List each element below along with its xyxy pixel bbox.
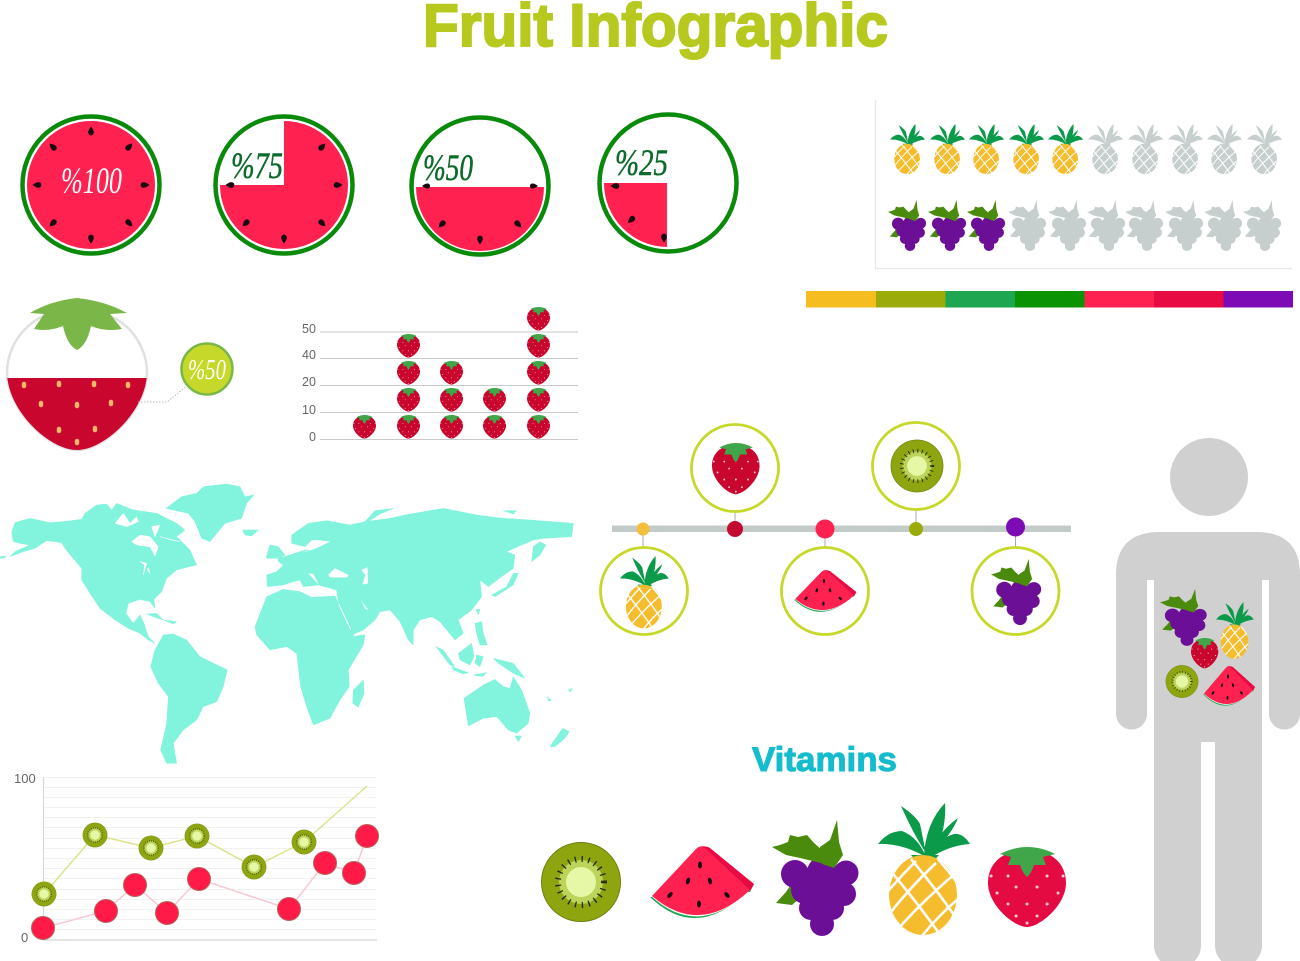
gauge: watermelon 50%: %50 xyxy=(423,148,473,189)
icon: strawberry in body xyxy=(1191,638,1218,668)
strawberry bar chart: 0 xyxy=(309,430,316,444)
gauge: watermelon 75% xyxy=(216,116,352,254)
colour bar xyxy=(806,291,1293,308)
gauge: watermelon 50% xyxy=(412,118,548,254)
icon: watermelon xyxy=(794,570,856,612)
grape row: 3 of 10 xyxy=(888,200,1281,251)
vitamins fruit row xyxy=(542,803,1066,943)
icon: kiwi in body xyxy=(1166,665,1198,698)
icon: watermelon in body xyxy=(1203,666,1255,706)
series: kiwi xyxy=(32,786,367,906)
heading: vitamins: Vitamins xyxy=(752,741,897,779)
world map xyxy=(0,484,573,763)
icon: pineapple in body xyxy=(1216,602,1254,662)
person silhouette xyxy=(1116,438,1300,961)
line chart: 0 xyxy=(21,930,28,945)
icon: grapes in body xyxy=(1160,589,1207,646)
map: eurasia, africa and oceania xyxy=(255,508,573,747)
callout badge 50%: %50 xyxy=(188,354,226,386)
line chart: 100 xyxy=(14,771,36,786)
gauge: watermelon 75%: %75 xyxy=(231,146,283,187)
icon: kiwi xyxy=(891,440,943,492)
pineapple row: 5 of 10 xyxy=(890,124,1282,177)
series: watermelon xyxy=(32,824,378,940)
strawberry bar chart: 50 xyxy=(302,322,316,336)
line chart xyxy=(14,771,378,945)
strawberry gauge 50% xyxy=(7,298,232,450)
gauge: watermelon 100%: %100 xyxy=(61,161,122,202)
icon: grapes xyxy=(772,820,858,936)
timeline xyxy=(600,422,1071,634)
icon: pineapple xyxy=(620,556,669,633)
gauge: watermelon 25% xyxy=(600,114,736,252)
icon: pineapple xyxy=(878,803,970,943)
strawberry bar chart: 20 xyxy=(302,375,316,389)
icon: strawberry xyxy=(712,443,760,494)
strawberry bar chart: 10 xyxy=(302,403,316,417)
callout badge 50% xyxy=(138,344,232,402)
gauge: watermelon 25%: %25 xyxy=(615,143,668,184)
gauge: watermelon 100% xyxy=(22,116,160,254)
panel: fruit pictograms xyxy=(876,100,1292,268)
icon: kiwi xyxy=(542,842,620,922)
icon: strawberry xyxy=(988,847,1066,927)
strawberry bar chart: 40 xyxy=(302,348,316,362)
icon: watermelon xyxy=(650,846,754,918)
icon: grapes xyxy=(991,559,1041,625)
map: americas and greenland xyxy=(0,484,258,763)
strawberry bar chart xyxy=(302,307,578,444)
